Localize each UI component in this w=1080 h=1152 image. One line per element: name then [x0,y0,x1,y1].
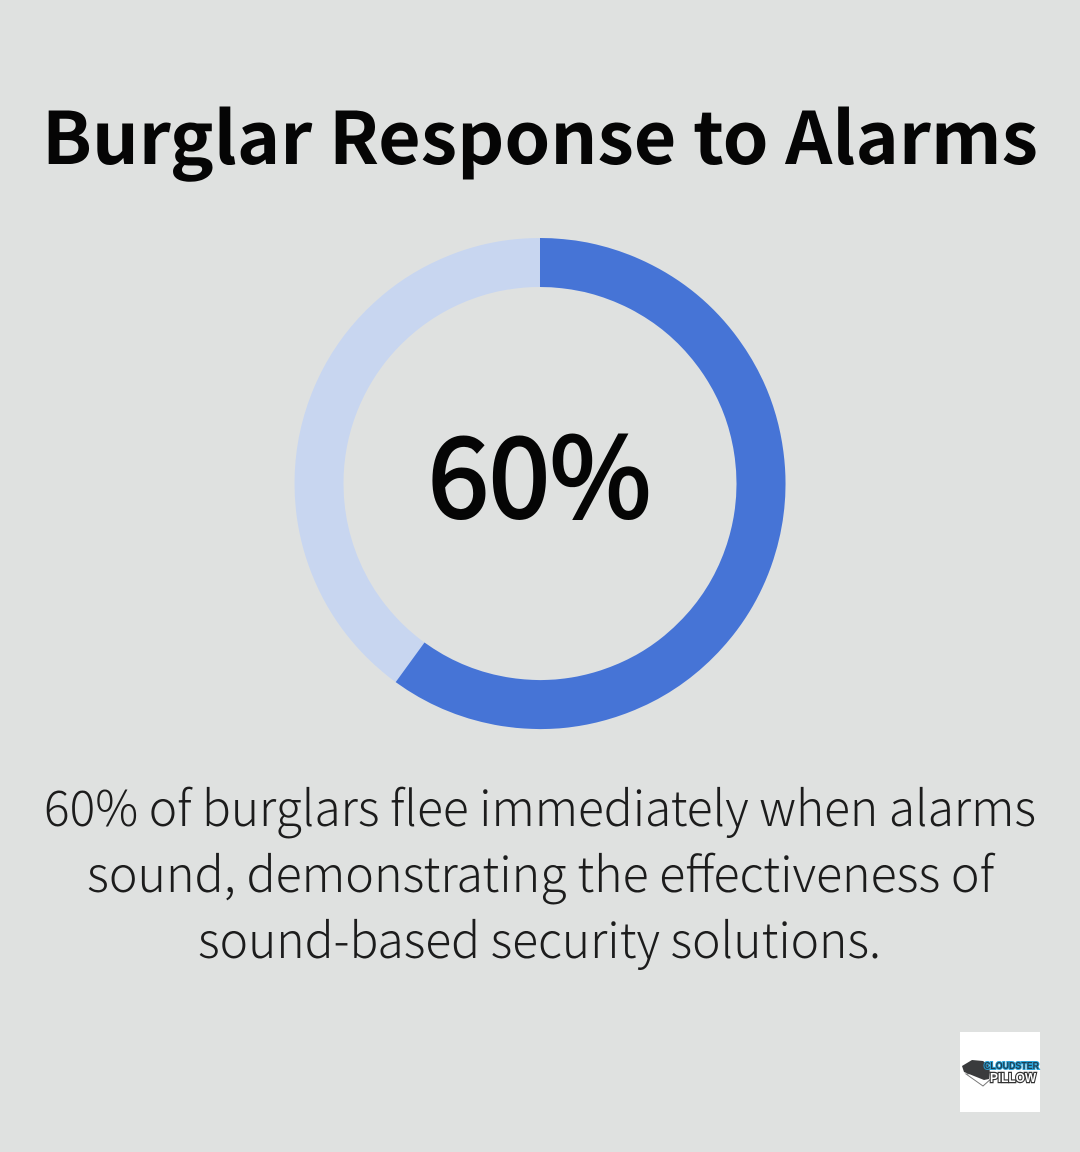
description text [44,770,1036,973]
logo wordmark [984,1061,1040,1085]
title: Burglar Response to Alarms [42,80,1038,185]
logo wordmark: PILLOW [990,1070,1037,1085]
icon: pillow [962,1060,990,1080]
description text: sound, demonstrating the effectiveness of [87,836,995,907]
logo: Cloudster Pillow [960,1032,1040,1112]
logo wordmark: CLOUDSTER [984,1061,1040,1072]
donut track [319,262,761,704]
logo background [960,1032,1040,1112]
donut center value: 60% [428,389,651,549]
description text: 60% of burglars flee immediately when alarms [44,770,1036,841]
icon: pillow sheet [966,1072,992,1086]
donut value arc [410,262,761,704]
description text: sound-based security solutions. [198,902,881,973]
donut chart: 60 percent [319,262,761,704]
